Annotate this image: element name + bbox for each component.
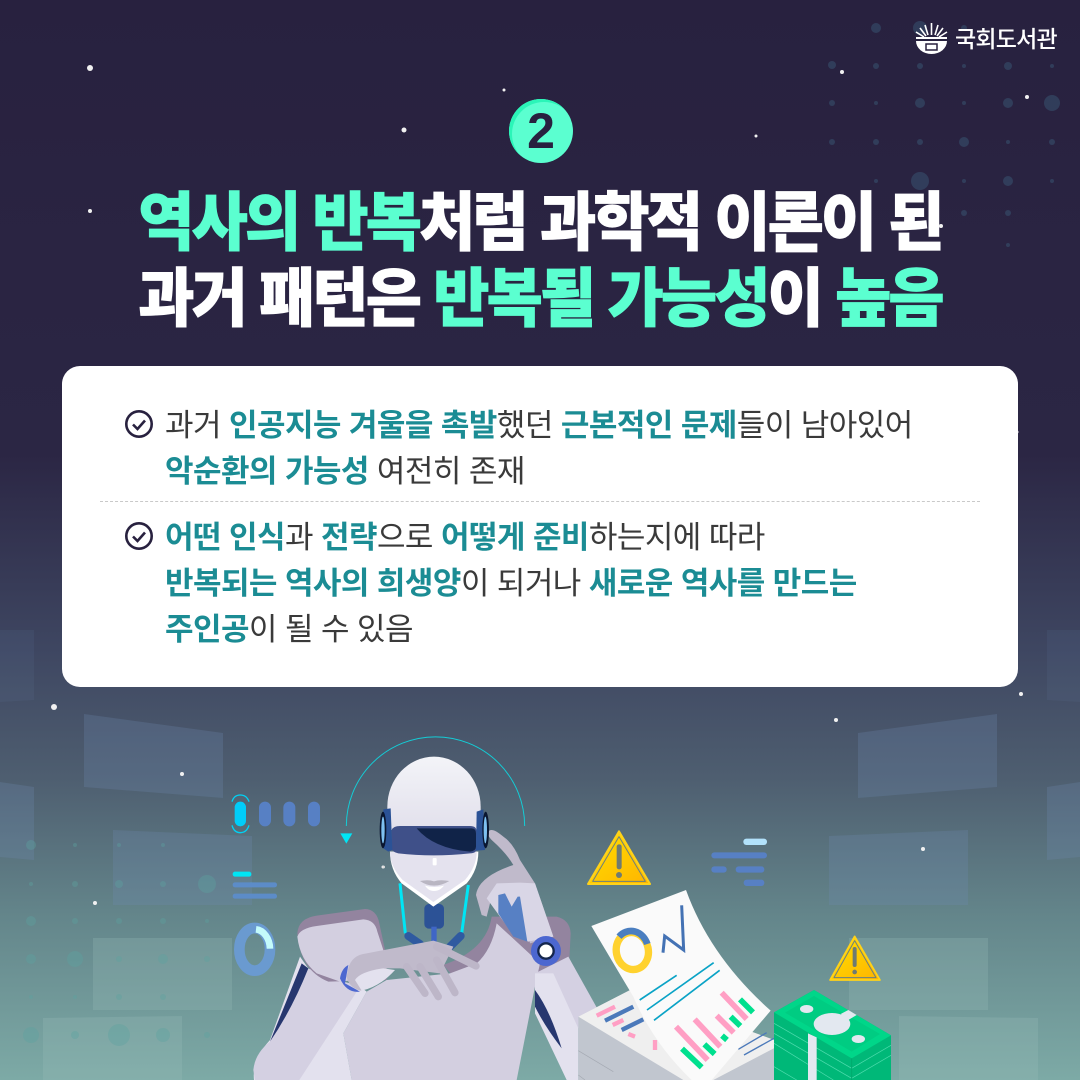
text: point 1 line 2: 악순환의 가능성 여전히 존재 [165, 454, 525, 489]
paper stack [578, 988, 783, 1080]
arm back layers [254, 957, 308, 1080]
panel: key points [62, 366, 1018, 687]
title line 2: 과거 패턴은 반복될 가능성이 높음 [138, 263, 942, 335]
number badge: 2 [527, 103, 555, 159]
shoulder collar [297, 909, 387, 982]
icon: open book emblem [916, 23, 948, 54]
logo: National Assembly Library [916, 23, 1057, 54]
icon: warning large [588, 831, 650, 884]
torso [343, 923, 540, 1080]
logo wordmark: 국회도서관 [955, 26, 1057, 52]
text: point 2 line 3: 주인공이 될 수 있음 [165, 612, 413, 647]
head [387, 757, 481, 830]
headphones [383, 808, 392, 852]
number badge [509, 99, 573, 163]
raised arm [476, 830, 553, 943]
icon: warning small [830, 936, 880, 980]
robot [232, 737, 600, 1080]
money stack [774, 990, 891, 1080]
UI lines [711, 839, 767, 886]
resting hand [340, 965, 360, 992]
face [433, 858, 437, 865]
UI widgets [232, 737, 525, 971]
icon: check 2 [125, 522, 153, 550]
text: point 2 line 2: 반복되는 역사의 희생양이 되거나 새로운 역사를 만드는 [165, 566, 857, 601]
title line 1: 역사의 반복처럼 과학적 이론이 된 [138, 187, 942, 259]
text: point 1 line 1: 과거 인공지능 겨울을 촉발했던 근본적인 문제들이 남아있어 [165, 408, 913, 443]
neck and cables [400, 883, 468, 933]
icon: check 1 [125, 410, 153, 438]
report page [591, 890, 771, 1080]
text: point 2 line 1: 어떤 인식과 전략으로 어떻게 준비하는지에 따라 [165, 520, 765, 555]
visor [392, 826, 477, 855]
